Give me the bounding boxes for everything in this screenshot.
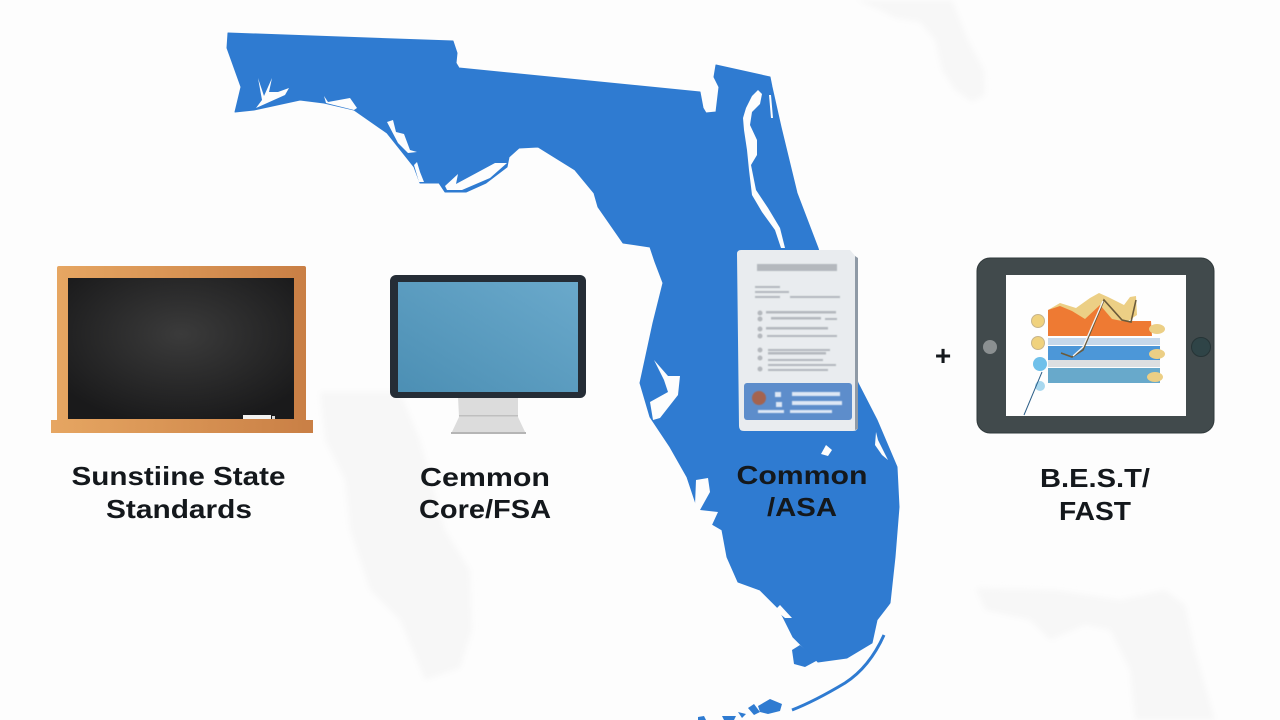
florida keys <box>792 645 818 667</box>
plus sign: + <box>935 340 951 371</box>
chart in tablet <box>1024 293 1165 415</box>
text: Standards <box>106 494 252 524</box>
home button right <box>1192 338 1210 356</box>
document icon <box>737 250 858 431</box>
bays and lagoons <box>256 78 888 618</box>
tablet icon <box>977 258 1214 433</box>
text: Core/FSA <box>419 494 551 524</box>
text: /ASA <box>767 492 837 522</box>
label: common core fsa: Cemmon <box>420 462 550 492</box>
home button left <box>983 340 997 354</box>
label: best fast: B.E.S.T/ <box>1040 463 1150 493</box>
label: sunshine state standards: Sunstiine State <box>72 461 286 491</box>
text: FAST <box>1059 496 1131 526</box>
label: common fasa: Common <box>736 460 868 490</box>
monitor icon <box>390 275 586 434</box>
Florida map <box>227 33 899 720</box>
faint background maps <box>320 0 1215 720</box>
chalkboard icon <box>51 266 313 433</box>
